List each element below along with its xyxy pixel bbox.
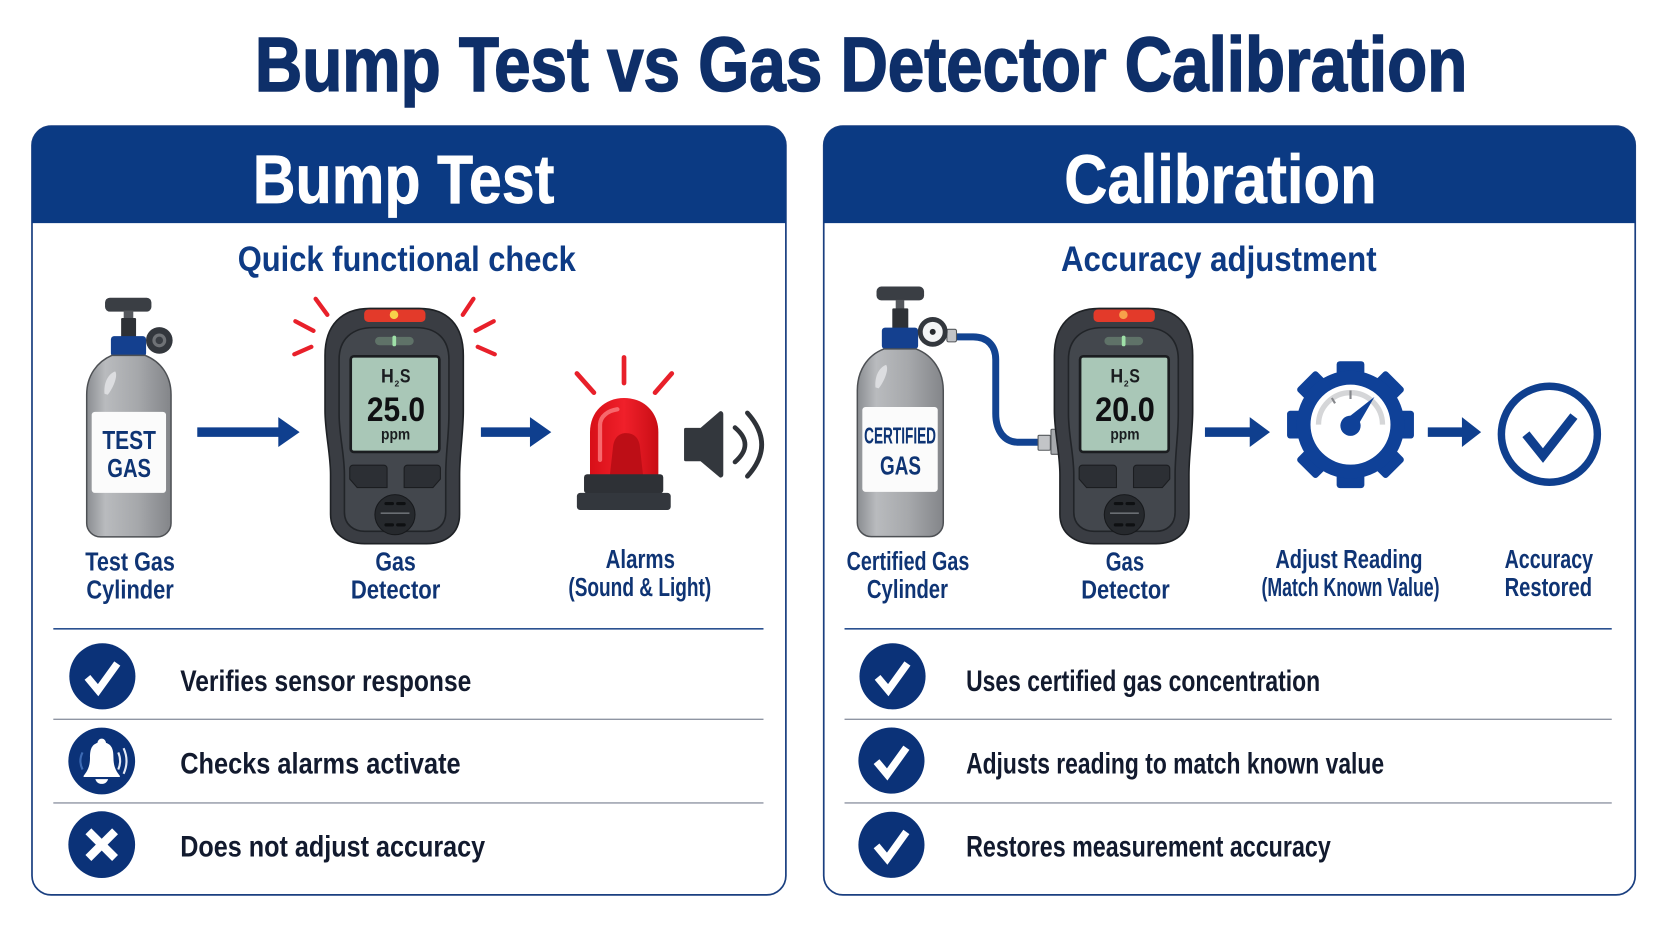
label: gas detector: Detector xyxy=(1081,576,1170,604)
label: alarms: (Sound & Light) xyxy=(568,574,711,602)
icon: check xyxy=(858,727,925,794)
label: certified gas cylinder: Certified Gas xyxy=(847,548,969,576)
label: gas detector xyxy=(1081,549,1170,604)
label: alarms: Alarms xyxy=(606,546,675,574)
arrow xyxy=(481,417,551,447)
icon: gas detector: 2 xyxy=(1124,378,1129,388)
icon: accuracy check circle xyxy=(1501,386,1597,482)
row: adjusts reading xyxy=(858,727,1384,794)
subheading: accuracy adjustment: Accuracy adjustment xyxy=(1061,240,1377,279)
subheading: quick functional check: Quick functional check xyxy=(238,240,576,279)
arrow xyxy=(197,417,300,447)
icon: certified gas cylinder: CERTIFIED xyxy=(864,423,936,449)
row: verifies sensor response: Verifies sensor response xyxy=(180,665,471,698)
label: test gas cylinder: Cylinder xyxy=(86,576,174,604)
icon: gas detector: 2 xyxy=(395,378,400,388)
panel header: bump test xyxy=(32,126,786,223)
arrow xyxy=(1428,417,1481,447)
label: test gas cylinder xyxy=(85,549,175,604)
icon: check xyxy=(69,643,135,709)
label: accuracy restored xyxy=(1505,546,1594,602)
row: does not adjust accuracy: Does not adjust accuracy xyxy=(180,831,486,864)
label: adjust reading xyxy=(1261,546,1440,602)
label: alarms xyxy=(568,546,711,602)
label: gas detector xyxy=(351,549,440,604)
panel: calibration xyxy=(824,126,1635,895)
icon: bell xyxy=(68,728,135,794)
heading: bump test: Bump Test xyxy=(253,142,554,218)
icon: certified gas cylinder xyxy=(857,287,956,537)
label: gas detector: Detector xyxy=(351,576,440,604)
row: restores accuracy: Restores measurement accuracy xyxy=(966,831,1331,864)
row: adjusts reading: Adjusts reading to match known value xyxy=(966,747,1384,780)
row: checks alarms activate xyxy=(68,728,461,794)
row: uses certified gas concentration xyxy=(859,643,1320,709)
icon: gas detector xyxy=(325,308,463,544)
icon: check xyxy=(859,643,926,709)
icon: cross xyxy=(68,811,135,878)
panel header: calibration xyxy=(824,126,1635,223)
icon: red flash rays xyxy=(294,299,495,354)
row: checks alarms activate: Checks alarms activate xyxy=(180,747,461,780)
arrow xyxy=(1205,417,1270,447)
icon: loudspeaker xyxy=(684,411,762,478)
row: restores accuracy xyxy=(858,812,1331,878)
icon: hose xyxy=(956,337,1039,442)
label: certified gas cylinder xyxy=(847,548,969,604)
icon: certified gas cylinder: GAS xyxy=(880,452,921,480)
row: does not adjust accuracy xyxy=(68,811,486,878)
icon: gas detector: 20.0 xyxy=(1095,391,1155,429)
icon: gear with gauge xyxy=(1287,361,1414,488)
icon: gas detector: 25.0 xyxy=(367,391,425,429)
icon: gas detector: ppm xyxy=(1110,427,1140,444)
title: Bump Test vs Gas Detector Calibration xyxy=(255,23,1467,108)
label: adjust reading: (Match Known Value) xyxy=(1261,574,1440,602)
icon: gas detector: S xyxy=(400,367,411,388)
icon: test gas cylinder xyxy=(87,298,173,537)
row: verifies sensor response xyxy=(69,643,471,709)
icon: test gas cylinder: GAS xyxy=(107,455,151,483)
icon: gas detector: S xyxy=(1129,367,1140,388)
label: test gas cylinder: Test Gas xyxy=(85,549,175,577)
row: uses certified gas concentration: Uses certified gas concentration xyxy=(966,665,1320,698)
label: certified gas cylinder: Cylinder xyxy=(867,576,948,604)
icon: gas detector xyxy=(1038,308,1193,544)
panel: bump test xyxy=(32,126,786,895)
icon: test gas cylinder: TEST xyxy=(102,427,156,455)
label: adjust reading: Adjust Reading xyxy=(1275,546,1422,574)
heading: calibration: Calibration xyxy=(1064,142,1377,218)
label: gas detector: Gas xyxy=(375,549,416,577)
icon: red alarm beacon xyxy=(577,357,672,510)
icon: check xyxy=(858,812,925,878)
label: accuracy restored: Restored xyxy=(1505,574,1592,602)
icon: gas detector: H xyxy=(381,367,394,388)
icon: gas detector: ppm xyxy=(381,427,410,444)
icon: gas detector: H xyxy=(1110,367,1123,388)
label: accuracy restored: Accuracy xyxy=(1505,546,1594,574)
label: gas detector: Gas xyxy=(1106,549,1144,577)
